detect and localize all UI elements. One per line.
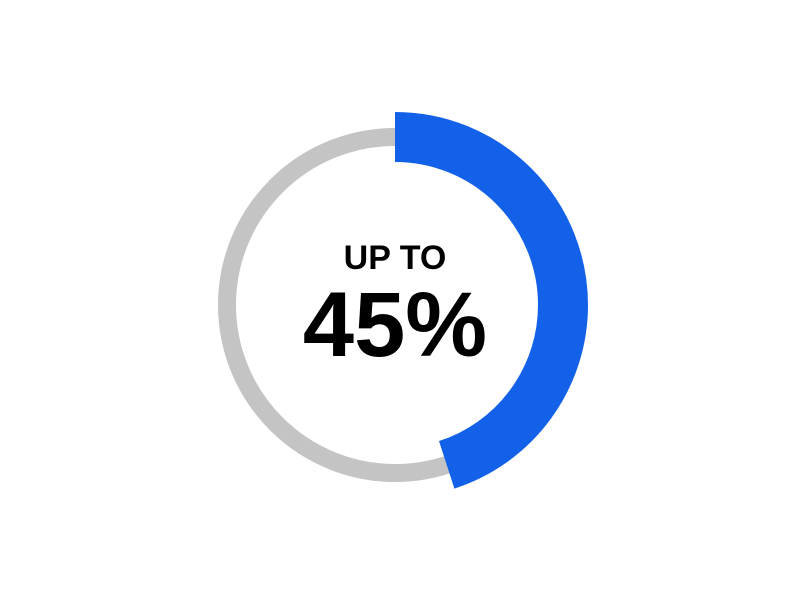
gray track ring	[227, 137, 563, 473]
blue progress arc (45%)	[227, 137, 563, 473]
label: UP TO: UP TO	[344, 239, 446, 277]
value: 45%: 45%	[303, 274, 487, 376]
